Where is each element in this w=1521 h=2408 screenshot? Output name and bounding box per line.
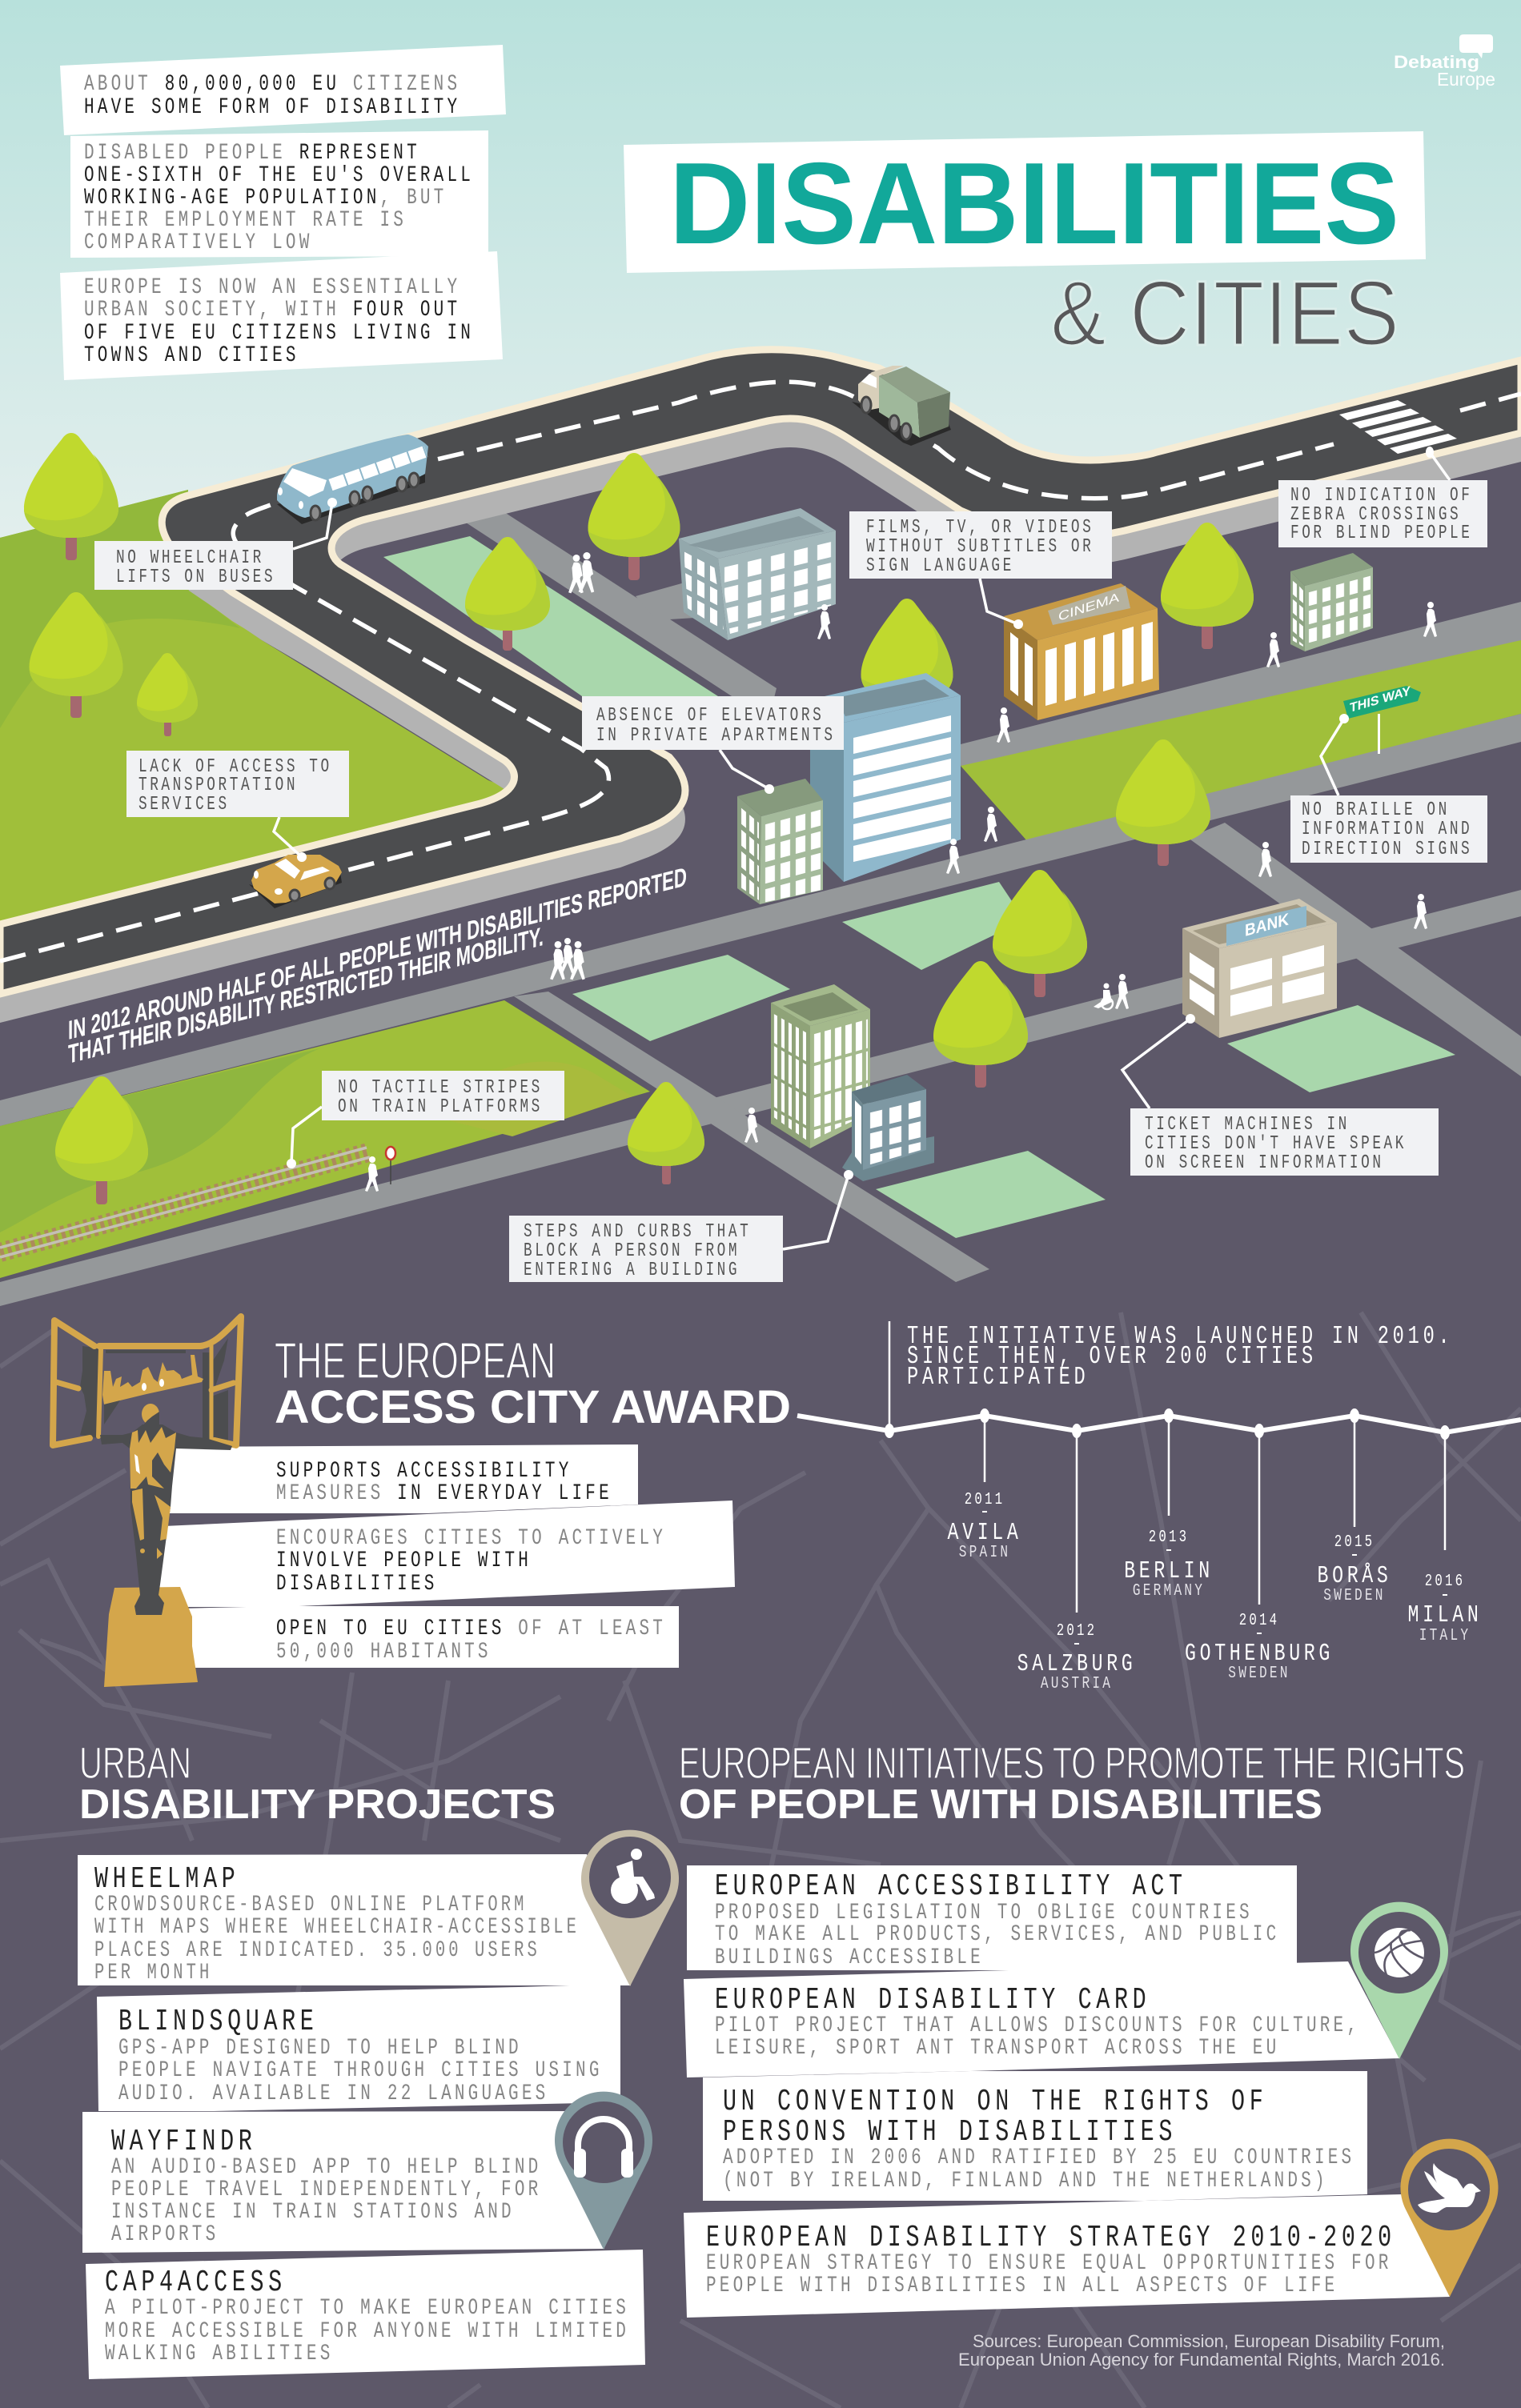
- panel: wayfindr: AN AUDIO-BASED APP TO HELP BLIND: [111, 2154, 541, 2180]
- panel: open to eu cities: [180, 1606, 679, 1668]
- panel: european accessibility act: EUROPEAN ACCESSIBILITY ACT: [715, 1869, 1187, 1904]
- icon: bus: [277, 435, 428, 524]
- building: bank: BANK: [1245, 909, 1290, 940]
- timeline entry: 2013 berlin: GERMANY: [1133, 1581, 1205, 1601]
- panel: urban society: EUROPE IS NOW AN ESSENTIALLY: [84, 274, 460, 300]
- panel: employment: THEIR EMPLOYMENT RATE IS: [84, 207, 407, 233]
- sky background: [0, 0, 1521, 560]
- title panel: DISABILITIES: [669, 138, 1399, 268]
- building: right green: [1290, 553, 1373, 651]
- panel: un convention: (NOT BY IRELAND, FINLAND AND THE NETHERLANDS): [723, 2168, 1328, 2194]
- panel: un convention: [703, 2071, 1367, 2201]
- callout: wheelchair lifts: LIFTS ON BUSES: [116, 567, 275, 588]
- timeline entry: 2011 avila: AVILA: [948, 1519, 1021, 1547]
- grey side streets: [0, 512, 1521, 1306]
- callout: elevators: IN PRIVATE APARTMENTS: [596, 726, 836, 747]
- panel: wheelmap: PER MONTH: [94, 1961, 212, 1985]
- text: initiative launched: PARTICIPATED: [907, 1364, 1089, 1392]
- panel: employment: ONE-SIXTH OF THE EU'S OVERALL: [84, 162, 474, 188]
- icon: basketball pin: [1350, 1902, 1448, 2059]
- panel: wheelmap: WITH MAPS WHERE WHEELCHAIR-ACCESSIBLE: [94, 1916, 580, 1940]
- panel: urban society: URBAN SOCIETY, WITH FOUR OUT: [84, 297, 460, 323]
- panel: eu citizens: ABOUT 80,000,000 EU CITIZENS: [84, 71, 460, 97]
- panel: employment: DISABLED PEOPLE REPRESENT: [84, 140, 420, 166]
- callout: zebra crossings: NO INDICATION OF: [1290, 486, 1472, 507]
- panel: encourages cities: ENCOURAGES CITIES TO ACTIVELY: [276, 1525, 666, 1551]
- panel: cap4access: CAP4ACCESS: [105, 2266, 287, 2300]
- timeline entry: 2012 salzburg: [1017, 1621, 1136, 1693]
- callout: braille: DIRECTION SIGNS: [1302, 839, 1472, 860]
- text: initiative launched: SINCE THEN, OVER 200 CITIES: [907, 1343, 1317, 1371]
- icon: car: [249, 855, 342, 908]
- timeline entry: 2016 milan: MILAN: [1408, 1601, 1482, 1629]
- panel: cap4access: MORE ACCESSIBLE FOR ANYONE WITH LIMITED: [105, 2318, 629, 2344]
- heading: european initiatives: [679, 1737, 1465, 1828]
- callout: zebra crossings: [1278, 447, 1487, 547]
- panel: wheelmap: PLACES ARE INDICATED. 35.000 USERS: [94, 1939, 540, 1963]
- building: grey block: [679, 508, 836, 640]
- grass: lower left with railway: [0, 1000, 650, 1278]
- callout: braille: INFORMATION AND: [1302, 819, 1472, 840]
- callout: steps and curbs: [509, 1170, 853, 1282]
- callout: ticket machines: ON SCREEN INFORMATION: [1145, 1153, 1384, 1174]
- callout: steps and curbs: BLOCK A PERSON FROM: [524, 1241, 740, 1262]
- panel: european accessibility act: BUILDINGS ACCESSIBLE: [715, 1945, 984, 1970]
- heading: urban disability projects: [79, 1737, 556, 1828]
- panel: employment: [70, 130, 488, 258]
- logo: debating europe: Debating: [1394, 52, 1479, 72]
- street strip: upper green median: [961, 602, 1521, 842]
- heading: european initiatives: OF PEOPLE WITH DISABILITIES: [679, 1781, 1322, 1828]
- heading: the european access city award: [275, 1332, 791, 1433]
- panel: wheelmap: [78, 1854, 631, 1985]
- panel: supports accessibility: SUPPORTS ACCESSIBILITY: [276, 1458, 572, 1484]
- heading: urban disability projects: DISABILITY PROJECTS: [79, 1781, 556, 1828]
- panel: blindsquare: GPS-APP DESIGNED TO HELP BLIND: [118, 2035, 522, 2061]
- panel: blindsquare: [97, 1984, 620, 2111]
- panel: blindsquare: BLINDSQUARE: [118, 2005, 318, 2039]
- building: cinema: [1004, 583, 1159, 720]
- timeline entry: 2014 gothenburg: 2014: [1239, 1611, 1279, 1630]
- panel: european disability strategy: EUROPEAN STRATEGY TO ENSURE EQUAL OPPORTUNITIES FOR: [706, 2250, 1392, 2276]
- panel: wayfindr: [82, 2111, 604, 2253]
- panel: blindsquare: AUDIO. AVAILABLE IN 22 LANGUAGES: [118, 2081, 548, 2106]
- callout: films and subtitles: WITHOUT SUBTITLES OR: [866, 537, 1094, 558]
- timeline entry: 2015 boras: BORÅS: [1318, 1562, 1391, 1590]
- timeline entry: 2016 milan: ITALY: [1419, 1625, 1471, 1645]
- callout: films and subtitles: SIGN LANGUAGE: [866, 556, 1014, 577]
- panel: urban society: [60, 251, 503, 380]
- panel: un convention: PERSONS WITH DISABILITIES: [723, 2115, 1177, 2150]
- callout: steps and curbs: STEPS AND CURBS THAT: [524, 1222, 751, 1243]
- callout: films and subtitles: [849, 511, 1112, 629]
- green lots: [383, 536, 1455, 1238]
- callout: ticket machines: [1122, 1014, 1439, 1176]
- panel: wayfindr: PEOPLE TRAVEL INDEPENDENTLY, FOR: [111, 2177, 541, 2202]
- panel: encourages cities: INVOLVE PEOPLE WITH: [276, 1548, 532, 1573]
- panel: eu citizens: [60, 45, 506, 135]
- panel: wayfindr: WAYFINDR: [111, 2125, 256, 2159]
- callout: wheelchair lifts: NO WHEELCHAIR: [116, 548, 264, 569]
- callout: ticket machines: CITIES DON'T HAVE SPEAK: [1145, 1134, 1407, 1155]
- logo: debating europe: Europe: [1437, 69, 1495, 90]
- callout: wheelchair lifts: [94, 498, 337, 590]
- panel: european disability card: EUROPEAN DISABILITY CARD: [715, 1983, 1150, 2017]
- callout: transportation access: LACK OF ACCESS TO: [138, 757, 332, 778]
- panel: eu citizens: HAVE SOME FORM OF DISABILITY: [84, 94, 460, 120]
- statue: access city award: [53, 1316, 241, 1687]
- panel: european accessibility act: TO MAKE ALL PRODUCTS, SERVICES, AND PUBLIC: [715, 1921, 1279, 1947]
- panel: encourages cities: DISABILITIES: [276, 1571, 438, 1597]
- callout: ticket machines: TICKET MACHINES IN: [1145, 1115, 1350, 1136]
- panel: employment: COMPARATIVELY LOW: [84, 230, 313, 255]
- building: tall olive: [771, 984, 870, 1148]
- timeline entry: 2011 avila: SPAIN: [959, 1542, 1010, 1562]
- zebra crossing: [1339, 400, 1457, 454]
- panel: un convention: ADOPTED IN 2006 AND RATIFIED BY 25 EU COUNTRIES: [723, 2145, 1354, 2170]
- timeline entry: 2013 berlin: [1124, 1528, 1214, 1601]
- icon: headphones pin: [555, 2092, 652, 2250]
- panel: wheelmap: WHEELMAP: [94, 1862, 239, 1897]
- timeline entry: 2014 gothenburg: SWEDEN: [1228, 1663, 1290, 1683]
- timeline entry: 2014 gothenburg: [1185, 1611, 1334, 1683]
- road with curb: [0, 350, 1521, 1023]
- timeline entry: 2013 berlin: BERLIN: [1124, 1557, 1214, 1585]
- timeline: zigzag: [797, 1321, 1521, 1613]
- panel: european disability strategy: PEOPLE WITH DISABILITIES IN ALL ASPECTS OF LIFE: [706, 2273, 1338, 2298]
- panel: european disability strategy: [684, 2194, 1450, 2318]
- trees: [24, 433, 1254, 1204]
- panel: european disability card: PILOT PROJECT THAT ALLOWS DISCOUNTS FOR CULTURE,: [715, 2013, 1360, 2038]
- timeline entry: 2015 boras: 2015: [1334, 1533, 1375, 1552]
- panel: cap4access: [86, 2250, 645, 2379]
- callout: braille: NO BRAILLE ON: [1302, 800, 1450, 821]
- icon: truck: [852, 366, 951, 446]
- timeline entry: 2015 boras: [1318, 1533, 1391, 1605]
- sources: Sources: European Commission, European Disability Forum,: [973, 2331, 1445, 2351]
- callout: zebra crossings: FOR BLIND PEOPLE: [1290, 523, 1472, 544]
- callout: steps and curbs: ENTERING A BUILDING: [524, 1260, 740, 1281]
- timeline entry: 2012 salzburg: SALZBURG: [1017, 1650, 1136, 1678]
- panel: open to eu cities: OPEN TO EU CITIES OF AT LEAST: [276, 1616, 666, 1641]
- panel: supports accessibility: MEASURES IN EVERYDAY LIFE: [276, 1480, 612, 1506]
- icon: wheelchair pin: [581, 1830, 679, 1986]
- panel: cap4access: A PILOT-PROJECT TO MAKE EUROPEAN CITIES: [105, 2295, 629, 2321]
- callout: tactile stripes: NO TACTILE STRIPES: [338, 1078, 543, 1099]
- timeline entry: 2016 milan: [1408, 1572, 1482, 1645]
- panel: un convention: UN CONVENTION ON THE RIGHTS OF: [723, 2085, 1267, 2119]
- panel: european accessibility act: PROPOSED LEGISLATION TO OBLIGE COUNTRIES: [715, 1900, 1253, 1925]
- callout: elevators: [582, 696, 844, 794]
- timeline entry: 2014 gothenburg: GOTHENBURG: [1185, 1640, 1334, 1668]
- callout: transportation access: [126, 751, 349, 862]
- panel: blindsquare: PEOPLE NAVIGATE THROUGH CITIES USING: [118, 2057, 603, 2083]
- panel: supports accessibility: [164, 1444, 638, 1513]
- timeline entry: 2013 berlin: 2013: [1149, 1528, 1189, 1547]
- building: small blue: [842, 1075, 934, 1181]
- callout: braille: [1290, 714, 1487, 863]
- sign: railway signal: [386, 1147, 395, 1184]
- panel: encourages cities: [152, 1500, 735, 1607]
- building: cinema: CINEMA: [1058, 591, 1119, 624]
- building: tall blue: [810, 673, 961, 882]
- heading: the european access city award: THE EUROPEAN: [275, 1332, 556, 1389]
- timeline entry: 2011 avila: [948, 1490, 1021, 1562]
- pedestrians: [365, 552, 1437, 1192]
- timeline entry: 2012 salzburg: AUSTRIA: [1041, 1673, 1113, 1693]
- building: green front: [737, 779, 823, 904]
- panel: european disability card: LEISURE, SPORT ANT TRANSPORT ACROSS THE EU: [715, 2035, 1279, 2061]
- building: bank: [1182, 899, 1337, 1038]
- logo: debating europe: [1394, 34, 1495, 90]
- railway: [0, 1148, 370, 1257]
- callout: transportation access: TRANSPORTATION: [138, 775, 298, 796]
- callout: elevators: ABSENCE OF ELEVATORS: [596, 706, 824, 727]
- heading: the european access city award: ACCESS CITY AWARD: [275, 1381, 791, 1433]
- panel: cap4access: WALKING ABILITIES: [105, 2341, 334, 2366]
- callout: zebra crossings: ZEBRA CROSSINGS: [1290, 505, 1461, 526]
- sign: this way: [1343, 683, 1421, 754]
- panel: european accessibility act: [687, 1865, 1297, 1970]
- grass: upper left: [0, 490, 509, 928]
- statement: half of people with disabilities: THAT THEIR DISABILITY RESTRICTED THEIR MOBILITY.: [68, 922, 544, 1070]
- timeline entry: 2011 avila: 2011: [965, 1490, 1005, 1509]
- callout: transportation access: SERVICES: [138, 795, 230, 815]
- panel: open to eu cities: 50,000 HABITANTS: [276, 1639, 492, 1665]
- statement: half of people with disabilities: IN 2012 AROUND HALF OF ALL PEOPLE WITH DISABILITIES REPORTED: [68, 863, 687, 1046]
- heading: urban disability projects: URBAN: [79, 1737, 191, 1788]
- callout: tactile stripes: [287, 1071, 564, 1168]
- panel: urban society: TOWNS AND CITIES: [84, 343, 299, 368]
- panel: wheelmap: CROWDSOURCE-BASED ONLINE PLATFORM: [94, 1893, 528, 1917]
- callout: films and subtitles: FILMS, TV, OR VIDEOS: [866, 518, 1094, 539]
- panel: european disability card: [684, 1961, 1399, 2077]
- text: initiative launched: [907, 1323, 1453, 1392]
- panel: european disability strategy: EUROPEAN DISABILITY STRATEGY 2010-2020: [706, 2221, 1396, 2255]
- timeline entry: 2015 boras: SWEDEN: [1323, 1585, 1386, 1605]
- icon: dove pin: [1401, 2139, 1498, 2297]
- callout: tactile stripes: ON TRAIN PLATFORMS: [338, 1097, 543, 1118]
- timeline entry: 2016 milan: 2016: [1425, 1572, 1465, 1591]
- panel: wayfindr: INSTANCE IN TRAIN STATIONS AND: [111, 2199, 515, 2225]
- text: initiative launched: THE INITIATIVE WAS LAUNCHED IN 2010.: [907, 1323, 1453, 1351]
- subtitle: and cities: & CITIES: [1050, 262, 1399, 365]
- panel: urban society: OF FIVE EU CITIZENS LIVING IN: [84, 320, 474, 346]
- panel: wayfindr: AIRPORTS: [111, 2222, 219, 2247]
- sources: European Union Agency for Fundamental Rights, March 2016.: [958, 2350, 1445, 2370]
- panel: employment: WORKING-AGE POPULATION, BUT: [84, 185, 447, 210]
- map lines background: [0, 1312, 1521, 2408]
- timeline entry: 2012 salzburg: 2012: [1057, 1621, 1097, 1641]
- sources: [958, 2331, 1445, 2370]
- sign: this way: THIS WAY: [1350, 683, 1411, 715]
